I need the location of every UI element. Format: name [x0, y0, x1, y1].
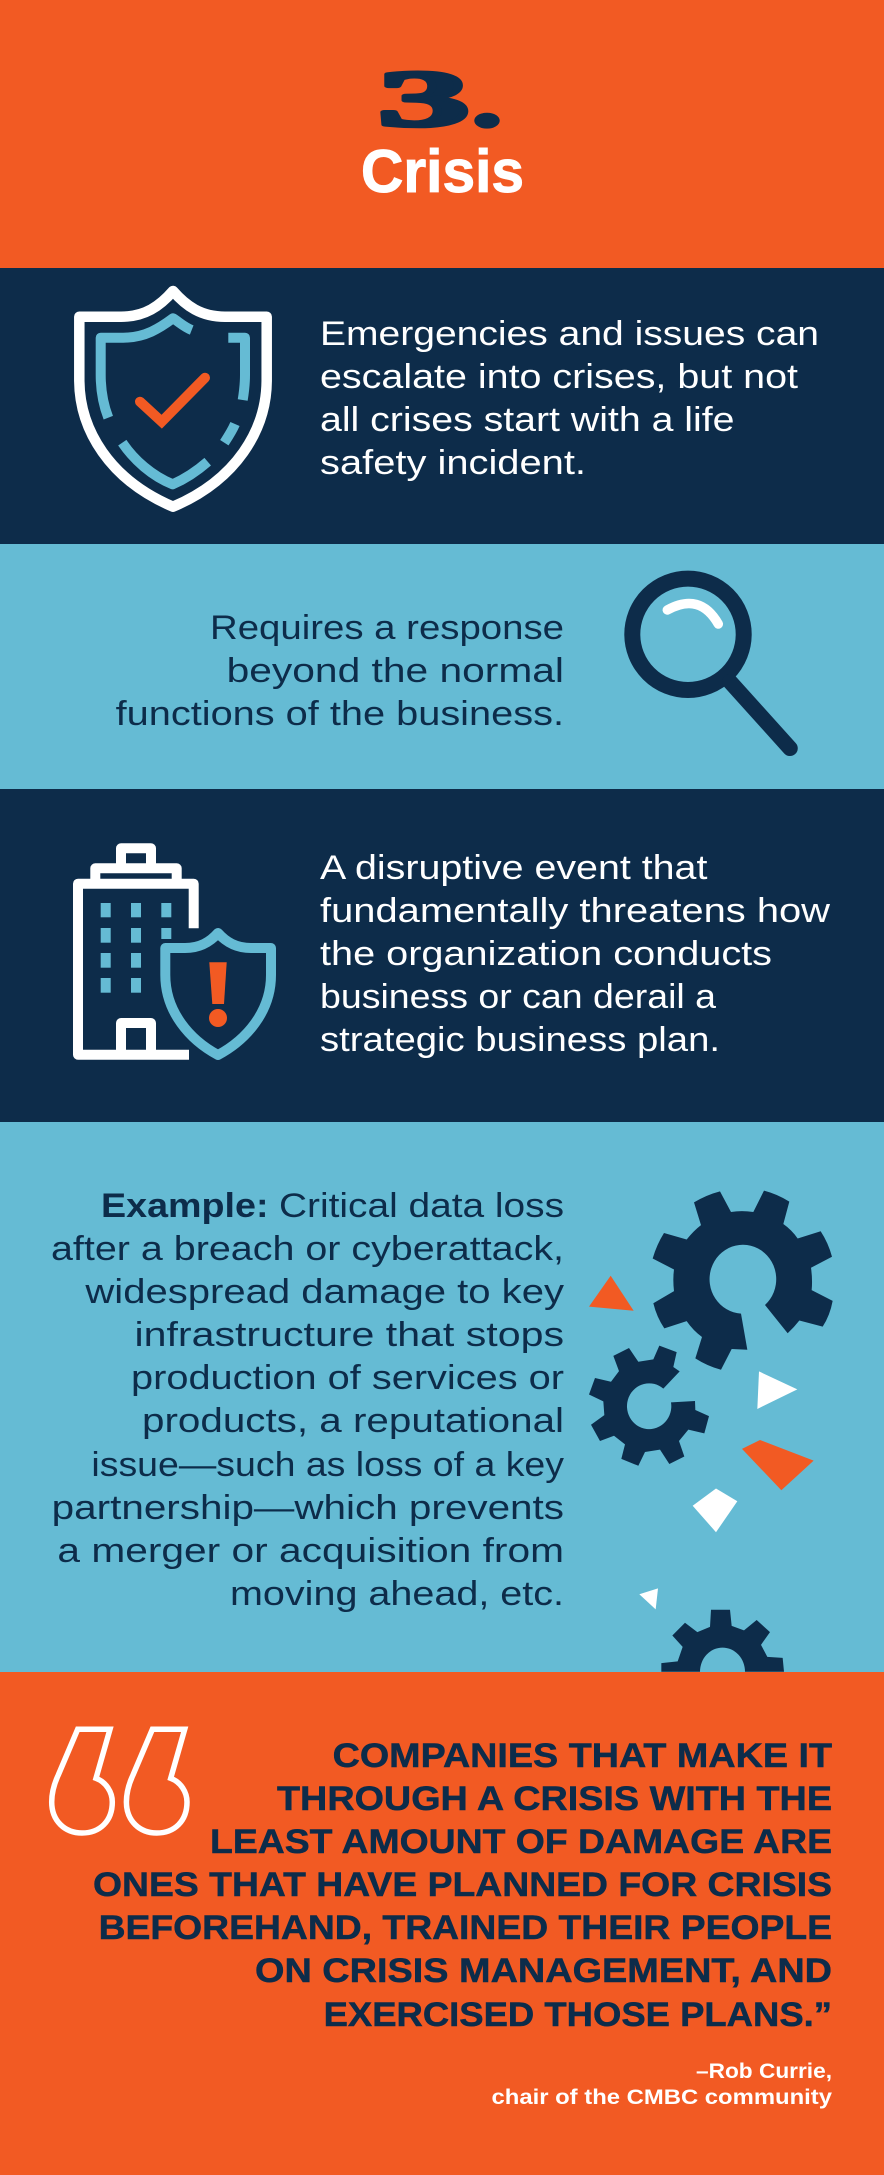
text block: [320, 849, 831, 1059]
text block: fundamentally threatens how: [320, 892, 831, 930]
icon: broken gears and shards: [589, 1191, 833, 1672]
text block: A disruptive event that: [320, 849, 708, 887]
attribution: –Rob Currie,: [696, 2060, 832, 2083]
section number: 3: [378, 56, 470, 144]
panel: title header: [0, 0, 884, 268]
text block: widespread damage to key: [84, 1273, 564, 1311]
text block: infrastructure that stops: [134, 1316, 564, 1354]
text block: products, a reputational: [142, 1402, 564, 1440]
quote text: ON CRISIS MANAGEMENT, AND: [255, 1952, 832, 1990]
panel: emergencies and issues: [0, 268, 884, 544]
attribution: chair of the CMBC community: [492, 2086, 832, 2109]
attribution: [492, 2060, 832, 2109]
text block: beyond the normal: [227, 652, 564, 690]
text block: strategic business plan.: [320, 1021, 720, 1059]
quote text: COMPANIES THAT MAKE IT: [333, 1737, 832, 1775]
quote text: BEFOREHAND, TRAINED THEIR PEOPLE: [99, 1909, 832, 1947]
icon: building with alert shield: [78, 848, 271, 1055]
quote text: EXERCISED THOSE PLANS.”: [324, 1996, 832, 2034]
text block: Requires a response: [210, 609, 564, 647]
text block: Critical data loss: [279, 1187, 564, 1225]
text block: production of services or: [131, 1359, 564, 1397]
panel: disruptive event: [0, 789, 884, 1122]
icon: quotation marks: [52, 1729, 187, 1833]
text block: safety incident.: [320, 444, 586, 482]
text block: partnership—which prevents: [52, 1489, 564, 1527]
section number: [378, 42, 506, 148]
text block: functions of the business.: [116, 695, 564, 733]
text block: moving ahead, etc.: [230, 1575, 564, 1613]
quote text: ONES THAT HAVE PLANNED FOR CRISIS: [93, 1866, 832, 1904]
quote text: LEAST AMOUNT OF DAMAGE ARE: [210, 1823, 832, 1861]
text block: Example:: [101, 1187, 268, 1225]
panel: example: [0, 1122, 884, 1672]
text block: all crises start with a life: [320, 401, 734, 439]
panel: quote: [0, 1672, 884, 2175]
icon: shield with check mark: [79, 291, 267, 507]
text block: [51, 1187, 564, 1613]
text block: business or can derail a: [320, 978, 716, 1016]
text block: the organization conducts: [320, 935, 772, 973]
heading: Crisis: [361, 138, 524, 205]
text block: issue—such as loss of a key: [91, 1446, 564, 1484]
panel: response requirement: [0, 544, 884, 789]
section number: .: [468, 42, 506, 148]
quote text: [93, 1737, 832, 2034]
text block: after a breach or cyberattack,: [51, 1230, 564, 1268]
quote text: THROUGH A CRISIS WITH THE: [277, 1780, 832, 1818]
text block: a merger or acquisition from: [57, 1532, 564, 1570]
text block: Emergencies and issues can: [320, 315, 819, 353]
text block: [320, 315, 819, 482]
icon: magnifying glass: [632, 579, 790, 748]
text block: escalate into crises, but not: [320, 358, 799, 396]
text block: [116, 609, 564, 733]
